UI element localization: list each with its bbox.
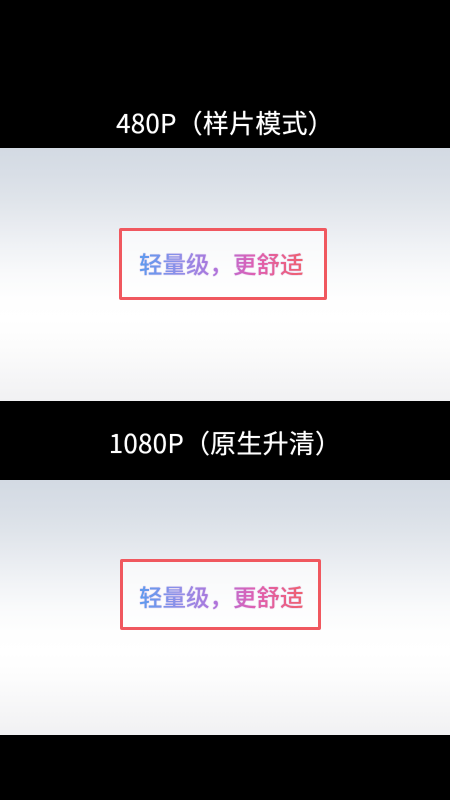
title: 480P: 480P（样片模式） [116,104,334,141]
panel: 480P sample [0,148,450,401]
slogan: 1080P: 轻量级，更舒适 [139,579,304,613]
slogan: 480P: 轻量级，更舒适 [139,246,304,280]
callout box: 480P [119,228,327,300]
callout box: 1080P [120,559,321,630]
title: 1080P: 1080P（原生升清） [109,424,341,461]
panel: 1080P sample [0,480,450,735]
